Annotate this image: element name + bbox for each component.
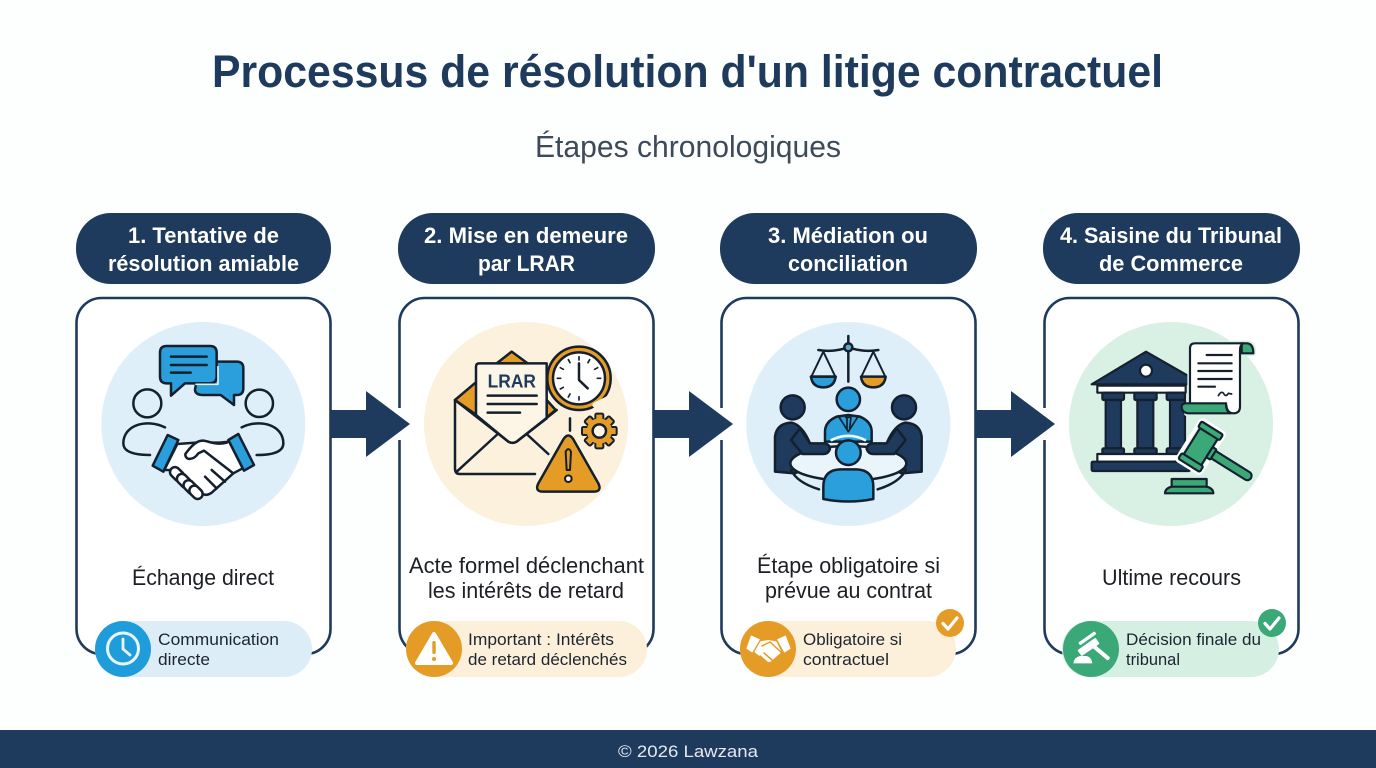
footer: © 2026 Lawzana [618,742,759,761]
step 4 card [1044,298,1298,654]
step 1 callout: Communication [158,630,279,649]
step 1 heading: 1. Tentative de [128,223,279,248]
step 2 callout [406,621,647,677]
panel: step 4 [1043,213,1300,677]
panel: step 3 [720,213,977,677]
step 3 callout [740,609,964,677]
icon: mediation table with scales [746,322,950,526]
step 3 description: Étape obligatoire si [757,553,940,578]
title: Processus de résolution d'un litige contractuel [212,46,1163,97]
step 2 heading: 2. Mise en demeure [424,223,628,248]
step 3 heading: conciliation [788,251,908,276]
step 2 heading [398,213,655,284]
step 1 callout: directe [158,650,210,669]
icon: courthouse, scroll and gavel [1069,322,1273,526]
step 3 description: prévue au contrat [765,578,932,603]
icon: handshake with speech bubbles [101,322,305,526]
icon: check badge [936,609,964,637]
step 3 heading: 3. Médiation ou [768,223,928,248]
step 4 heading [1043,213,1300,284]
arrow: step 3 to 4 [976,391,1055,457]
step 2 callout: de retard déclenchés [468,650,627,669]
icon: envelope, clock and warning [424,322,628,526]
subtitle: Étapes chronologiques [535,129,841,164]
step 4 callout: tribunal [1126,650,1180,669]
step 4 heading: de Commerce [1099,251,1243,276]
arrow: step 1 to 2 [331,391,410,457]
step 2 card [400,298,654,654]
step 1 heading [76,213,331,284]
step 4 callout [1062,609,1286,677]
icon: check badge [1258,609,1286,637]
step 1 heading: résolution amiable [108,251,299,276]
icon: envelope, clock and warning: LRAR [488,370,536,391]
step 1 callout [95,621,312,677]
step 2 description: les intérêts de retard [428,578,624,603]
step 2 callout: Important : Intérêts [468,630,614,649]
panel: step 1 [76,213,331,677]
step 3 callout: Obligatoire si [803,630,902,649]
step 4 description: Ultime recours [1102,565,1241,590]
step 4 callout: Décision finale du [1126,630,1261,649]
step 3 heading [720,213,977,284]
step 3 callout: contractuel [803,650,889,669]
step 4 heading: 4. Saisine du Tribunal [1060,223,1282,248]
step 2 heading: par LRAR [478,251,575,276]
panel: step 2 [398,213,655,677]
step 1 description: Échange direct [132,565,274,590]
footer [0,730,1376,768]
step 3 card [722,298,976,654]
arrow: step 2 to 3 [654,391,733,457]
step 1 card [76,298,330,654]
step 2 description: Acte formel déclenchant [409,553,644,578]
step 2 description [409,553,644,603]
step 3 description [757,553,940,603]
